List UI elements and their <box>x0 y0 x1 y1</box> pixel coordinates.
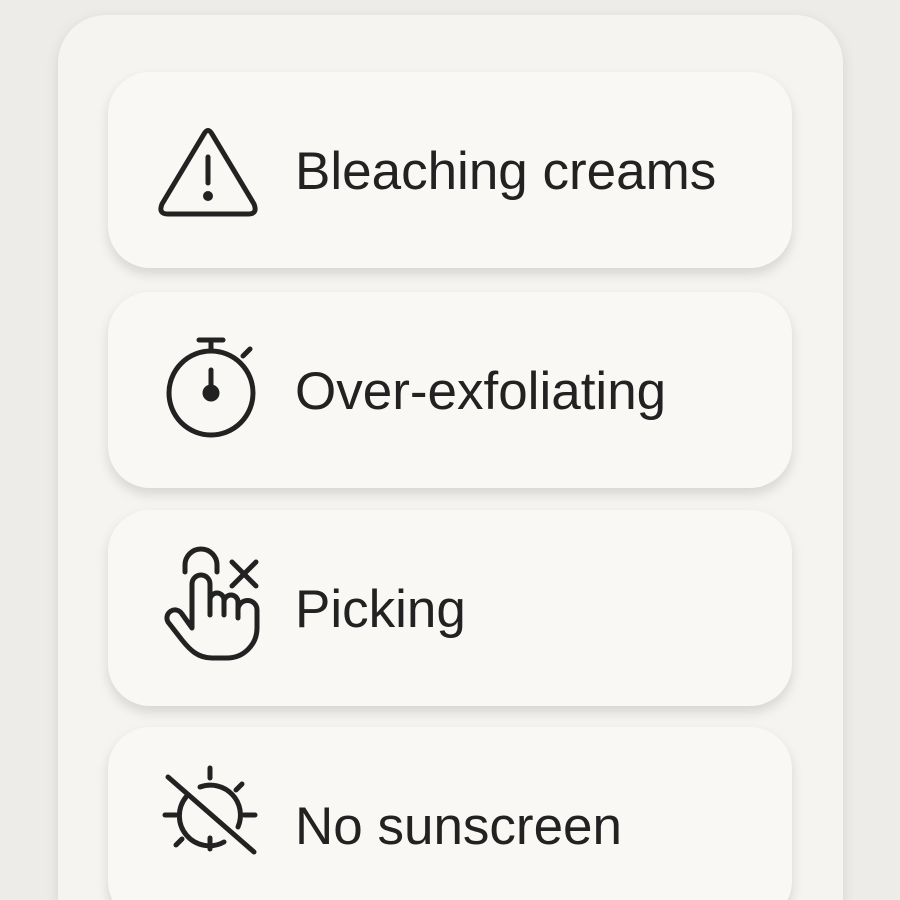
label: No sunscreen <box>295 797 622 856</box>
icon: stopwatch <box>166 338 256 438</box>
card: picking <box>108 510 792 706</box>
label: Picking <box>295 580 466 639</box>
icon: crossed sun <box>162 766 258 854</box>
icon: hand with x <box>164 546 260 660</box>
label: Over-exfoliating <box>295 362 666 421</box>
card: over-exfoliating <box>108 292 792 488</box>
label: Bleaching creams <box>295 142 716 201</box>
card: no sunscreen <box>108 727 792 900</box>
card: bleaching creams <box>108 72 792 268</box>
icon: warning triangle <box>158 128 258 216</box>
